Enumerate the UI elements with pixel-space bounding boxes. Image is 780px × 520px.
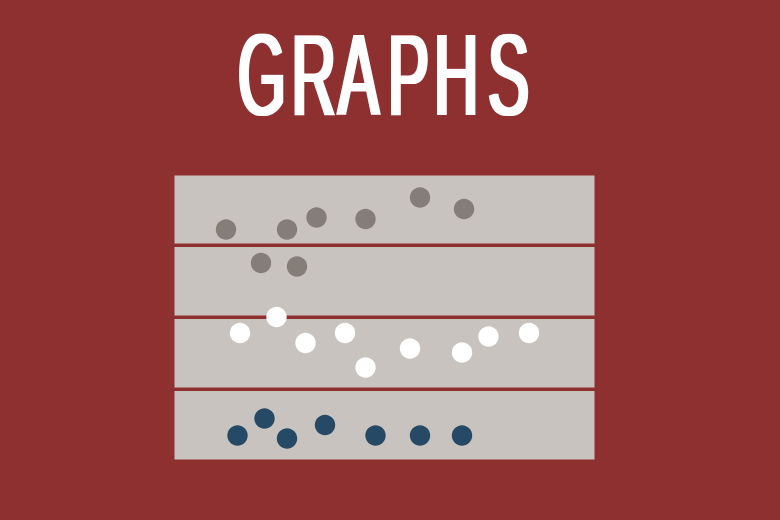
title: GRAPHS <box>238 10 529 140</box>
data points: grey series <box>216 187 474 277</box>
panel: row 3 <box>174 319 594 388</box>
panel: row 1 <box>174 176 594 244</box>
panel: row 4 <box>174 391 594 460</box>
data points: navy series <box>227 408 472 449</box>
panel: row 2 <box>174 247 594 316</box>
chart: dot plot with four rows <box>174 176 594 460</box>
data points: white series <box>230 307 539 378</box>
